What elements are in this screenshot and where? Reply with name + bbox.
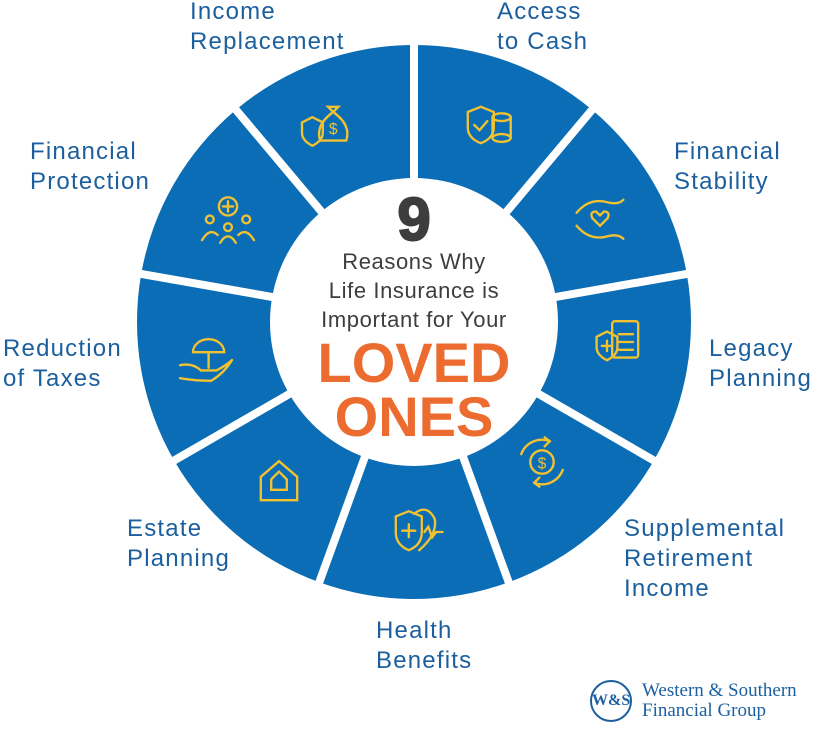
loved ones: ONES (335, 385, 493, 448)
label: reduction of taxes: of Taxes (3, 365, 102, 392)
label: legacy planning (709, 335, 812, 392)
loved ones: LOVED (318, 331, 510, 394)
subtitle: Life Insurance is (329, 278, 499, 303)
label: financial stability: Financial (674, 138, 781, 165)
label: supplemental retirement: Supplemental (624, 515, 785, 542)
logo: W&S (592, 692, 630, 709)
label: financial protection: Financial (30, 138, 137, 165)
subtitle: Important for Your (321, 307, 507, 332)
label: supplemental retirement: Income (624, 575, 710, 602)
icons: $ (329, 121, 338, 138)
logo: Western & Southern (642, 680, 797, 701)
label: reduction of taxes (3, 335, 122, 392)
logo: Financial Group (642, 700, 766, 721)
label: income replacement: Replacement (190, 28, 345, 55)
label: legacy planning: Legacy (709, 335, 794, 362)
label: access to cash: to Cash (497, 28, 588, 55)
label: estate planning: Estate (127, 515, 202, 542)
label: access to cash (497, 0, 588, 55)
label: financial protection: Protection (30, 168, 150, 195)
label: financial protection (30, 138, 150, 195)
logo (590, 680, 797, 722)
center text (318, 186, 510, 448)
label: financial stability: Stability (674, 168, 769, 195)
label: reduction of taxes: Reduction (3, 335, 122, 362)
label: estate planning: Planning (127, 545, 230, 572)
label: financial stability (674, 138, 781, 195)
segments (85, 0, 728, 643)
label: estate planning (127, 515, 230, 572)
label: health benefits (376, 617, 472, 674)
number 9: 9 (397, 186, 431, 253)
label: income replacement (190, 0, 345, 55)
icons (180, 107, 638, 550)
icons: $ (538, 456, 547, 472)
subtitle: Reasons Why (342, 249, 486, 274)
label: supplemental retirement: Retirement (624, 545, 753, 572)
label: supplemental retirement (624, 515, 785, 602)
loved ones (318, 331, 510, 448)
subtitle (321, 249, 507, 332)
label: legacy planning: Planning (709, 365, 812, 392)
label: health benefits: Health (376, 617, 453, 644)
label: health benefits: Benefits (376, 647, 472, 674)
